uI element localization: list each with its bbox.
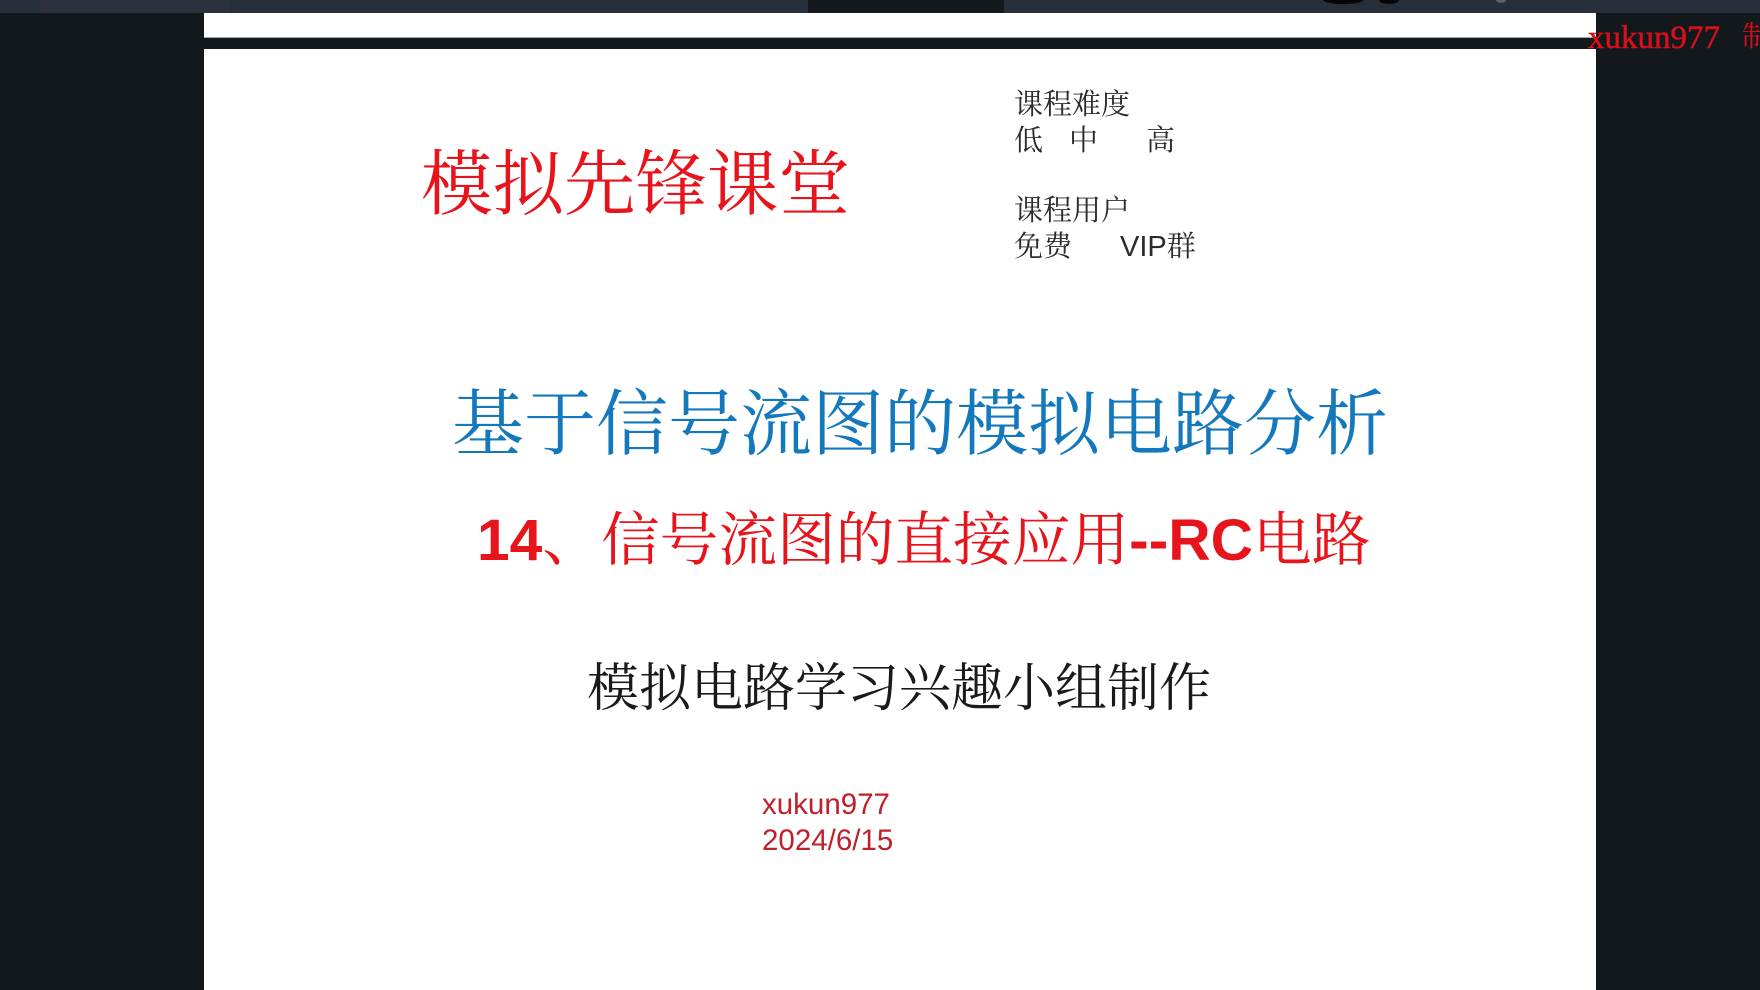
text block: course difficulty: 低: [1014, 124, 1043, 156]
dark tab gap: [808, 0, 1004, 13]
text block: course users: 课程用户: [1014, 195, 1130, 227]
subtitle: 14、信号流图的直接应用--RC电路: [477, 508, 1370, 573]
author and date: xukun977: [762, 788, 890, 821]
slide panel: [204, 49, 1596, 990]
slide top strip: [204, 13, 1596, 38]
author and date: 2024/6/15: [762, 824, 893, 856]
bar icon left blob: [1323, 0, 1363, 4]
text block: course difficulty: 中: [1069, 124, 1098, 156]
main title: 基于信号流图的模拟电路分析: [452, 385, 1388, 465]
heading: course brand: 模拟先锋课堂: [421, 145, 850, 225]
author and date: [762, 788, 893, 856]
text block: course users: [1014, 195, 1196, 262]
left tab segment: [40, 0, 230, 13]
watermark: xukun977: [1588, 20, 1720, 56]
bar grey dot: [1496, 0, 1506, 3]
bar icon right blob: [1379, 0, 1399, 4]
text block: course difficulty: 课程难度: [1014, 89, 1130, 121]
text block: course users: 免费 VIP群: [1014, 230, 1196, 262]
author group: 模拟电路学习兴趣小组制作: [587, 660, 1211, 718]
text block: course difficulty: [1014, 89, 1175, 156]
text block: course difficulty: 高: [1146, 124, 1175, 156]
top browser bar: [0, 0, 1760, 13]
